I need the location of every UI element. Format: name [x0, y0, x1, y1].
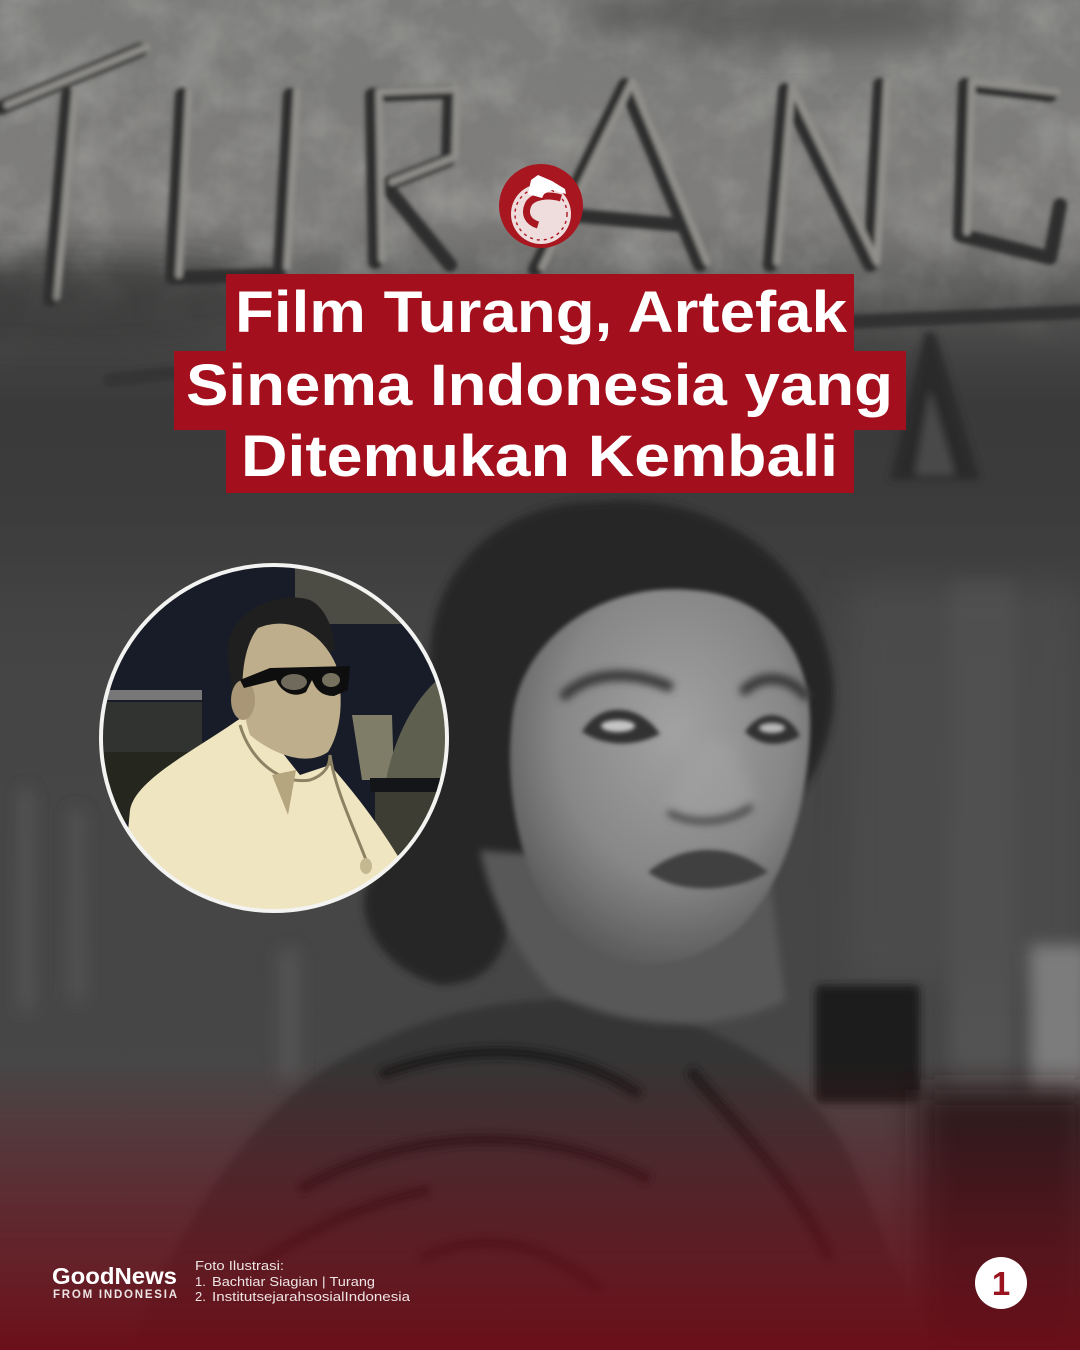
background title lettering: TURANG sticks — [0, 47, 1080, 380]
title: Sinema Indonesia yang — [186, 353, 893, 418]
photo credits: InstitutsejarahsosialIndonesia — [212, 1289, 411, 1304]
glasses — [240, 666, 350, 696]
photo credits — [195, 1258, 411, 1304]
photo credits: 2. — [195, 1289, 206, 1304]
main photo: girl looking up — [130, 501, 935, 1350]
shawl — [130, 999, 935, 1350]
hair — [364, 501, 834, 985]
photo credits: Bachtiar Siagian | Turang — [212, 1274, 375, 1289]
brand logo: GoodNews from Indonesia: FROM INDONESIA — [53, 1289, 177, 1301]
page number badge — [975, 1257, 1027, 1309]
logo badge — [499, 164, 583, 248]
brand logo: GoodNews from Indonesia — [52, 1263, 177, 1301]
eyebrows — [565, 676, 805, 695]
page number badge: 1 — [992, 1265, 1010, 1302]
eyes — [582, 710, 800, 744]
brand logo: GoodNews from Indonesia: GoodNews — [52, 1263, 177, 1289]
face — [510, 589, 810, 964]
red bottom gradient — [0, 1060, 1080, 1350]
photo credits: Foto Ilustrasi: — [195, 1258, 284, 1273]
wall remnant: hanging cloth — [890, 332, 980, 480]
circle portrait: Bachtiar Siagian — [100, 564, 450, 914]
photo credits: 1. — [195, 1274, 206, 1289]
title: Ditemukan Kembali — [241, 424, 838, 489]
nose — [664, 740, 756, 821]
lips — [648, 850, 768, 889]
title — [174, 274, 906, 493]
title: Film Turang, Artefak — [235, 280, 848, 345]
neck — [480, 850, 785, 1023]
fade from wall to room — [0, 270, 1080, 610]
